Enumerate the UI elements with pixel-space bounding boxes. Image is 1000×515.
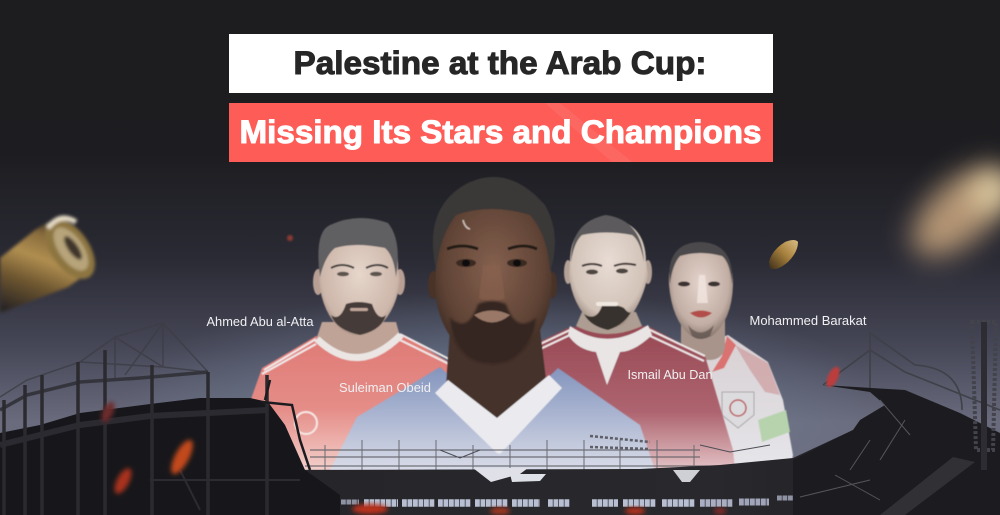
subtitle box: Missing Its Stars and Champions: Missing Its Stars and Champions	[240, 114, 762, 150]
eyes and brows	[331, 265, 388, 268]
player: Mohammed Barakat	[669, 242, 793, 472]
hair	[318, 218, 398, 277]
player: Ahmed Abu al-Atta	[250, 218, 450, 470]
embers	[99, 235, 842, 514]
hair	[571, 215, 644, 262]
collar	[317, 335, 401, 358]
label: Suleiman Obeid: Suleiman Obeid	[339, 381, 431, 395]
club badge	[722, 392, 754, 428]
floodlight tower	[972, 322, 996, 450]
sleeve stripes	[262, 339, 316, 374]
roof truss	[823, 333, 1000, 410]
club badge	[295, 412, 317, 434]
collar	[435, 375, 562, 454]
roof truss	[0, 323, 208, 397]
beard	[450, 301, 536, 364]
title box: Palestine at the Arab Cup	[229, 34, 773, 93]
hair	[433, 177, 555, 272]
beard	[584, 305, 632, 330]
title box: Palestine at the Arab Cup: Palestine at the Arab Cup:	[294, 45, 706, 81]
beard	[331, 302, 386, 335]
stadium lights row	[341, 498, 805, 503]
stadium ruins: right stand	[793, 322, 1000, 515]
label: Ismail Abu Dan: Ismail Abu Dan	[628, 368, 713, 382]
icon: out-of-focus bullet, top right	[897, 151, 1000, 273]
icon: blurred bullet, left	[0, 210, 105, 313]
label: Ahmed Abu al-Atta: Ahmed Abu al-Atta	[206, 315, 314, 329]
label: Mohammed Barakat: Mohammed Barakat	[750, 314, 867, 328]
hair	[669, 242, 732, 284]
subtitle box: Missing Its Stars and Champions	[229, 103, 773, 162]
barbed wire fence	[305, 436, 770, 470]
player: Suleiman Obeid	[330, 177, 655, 470]
stadium ruins: centre band	[290, 430, 1000, 515]
icon: small bullet	[769, 240, 798, 269]
player: Ismail Abu Dan	[534, 215, 735, 470]
captain armband	[758, 410, 790, 442]
stadium ruins: left stand	[0, 323, 340, 515]
